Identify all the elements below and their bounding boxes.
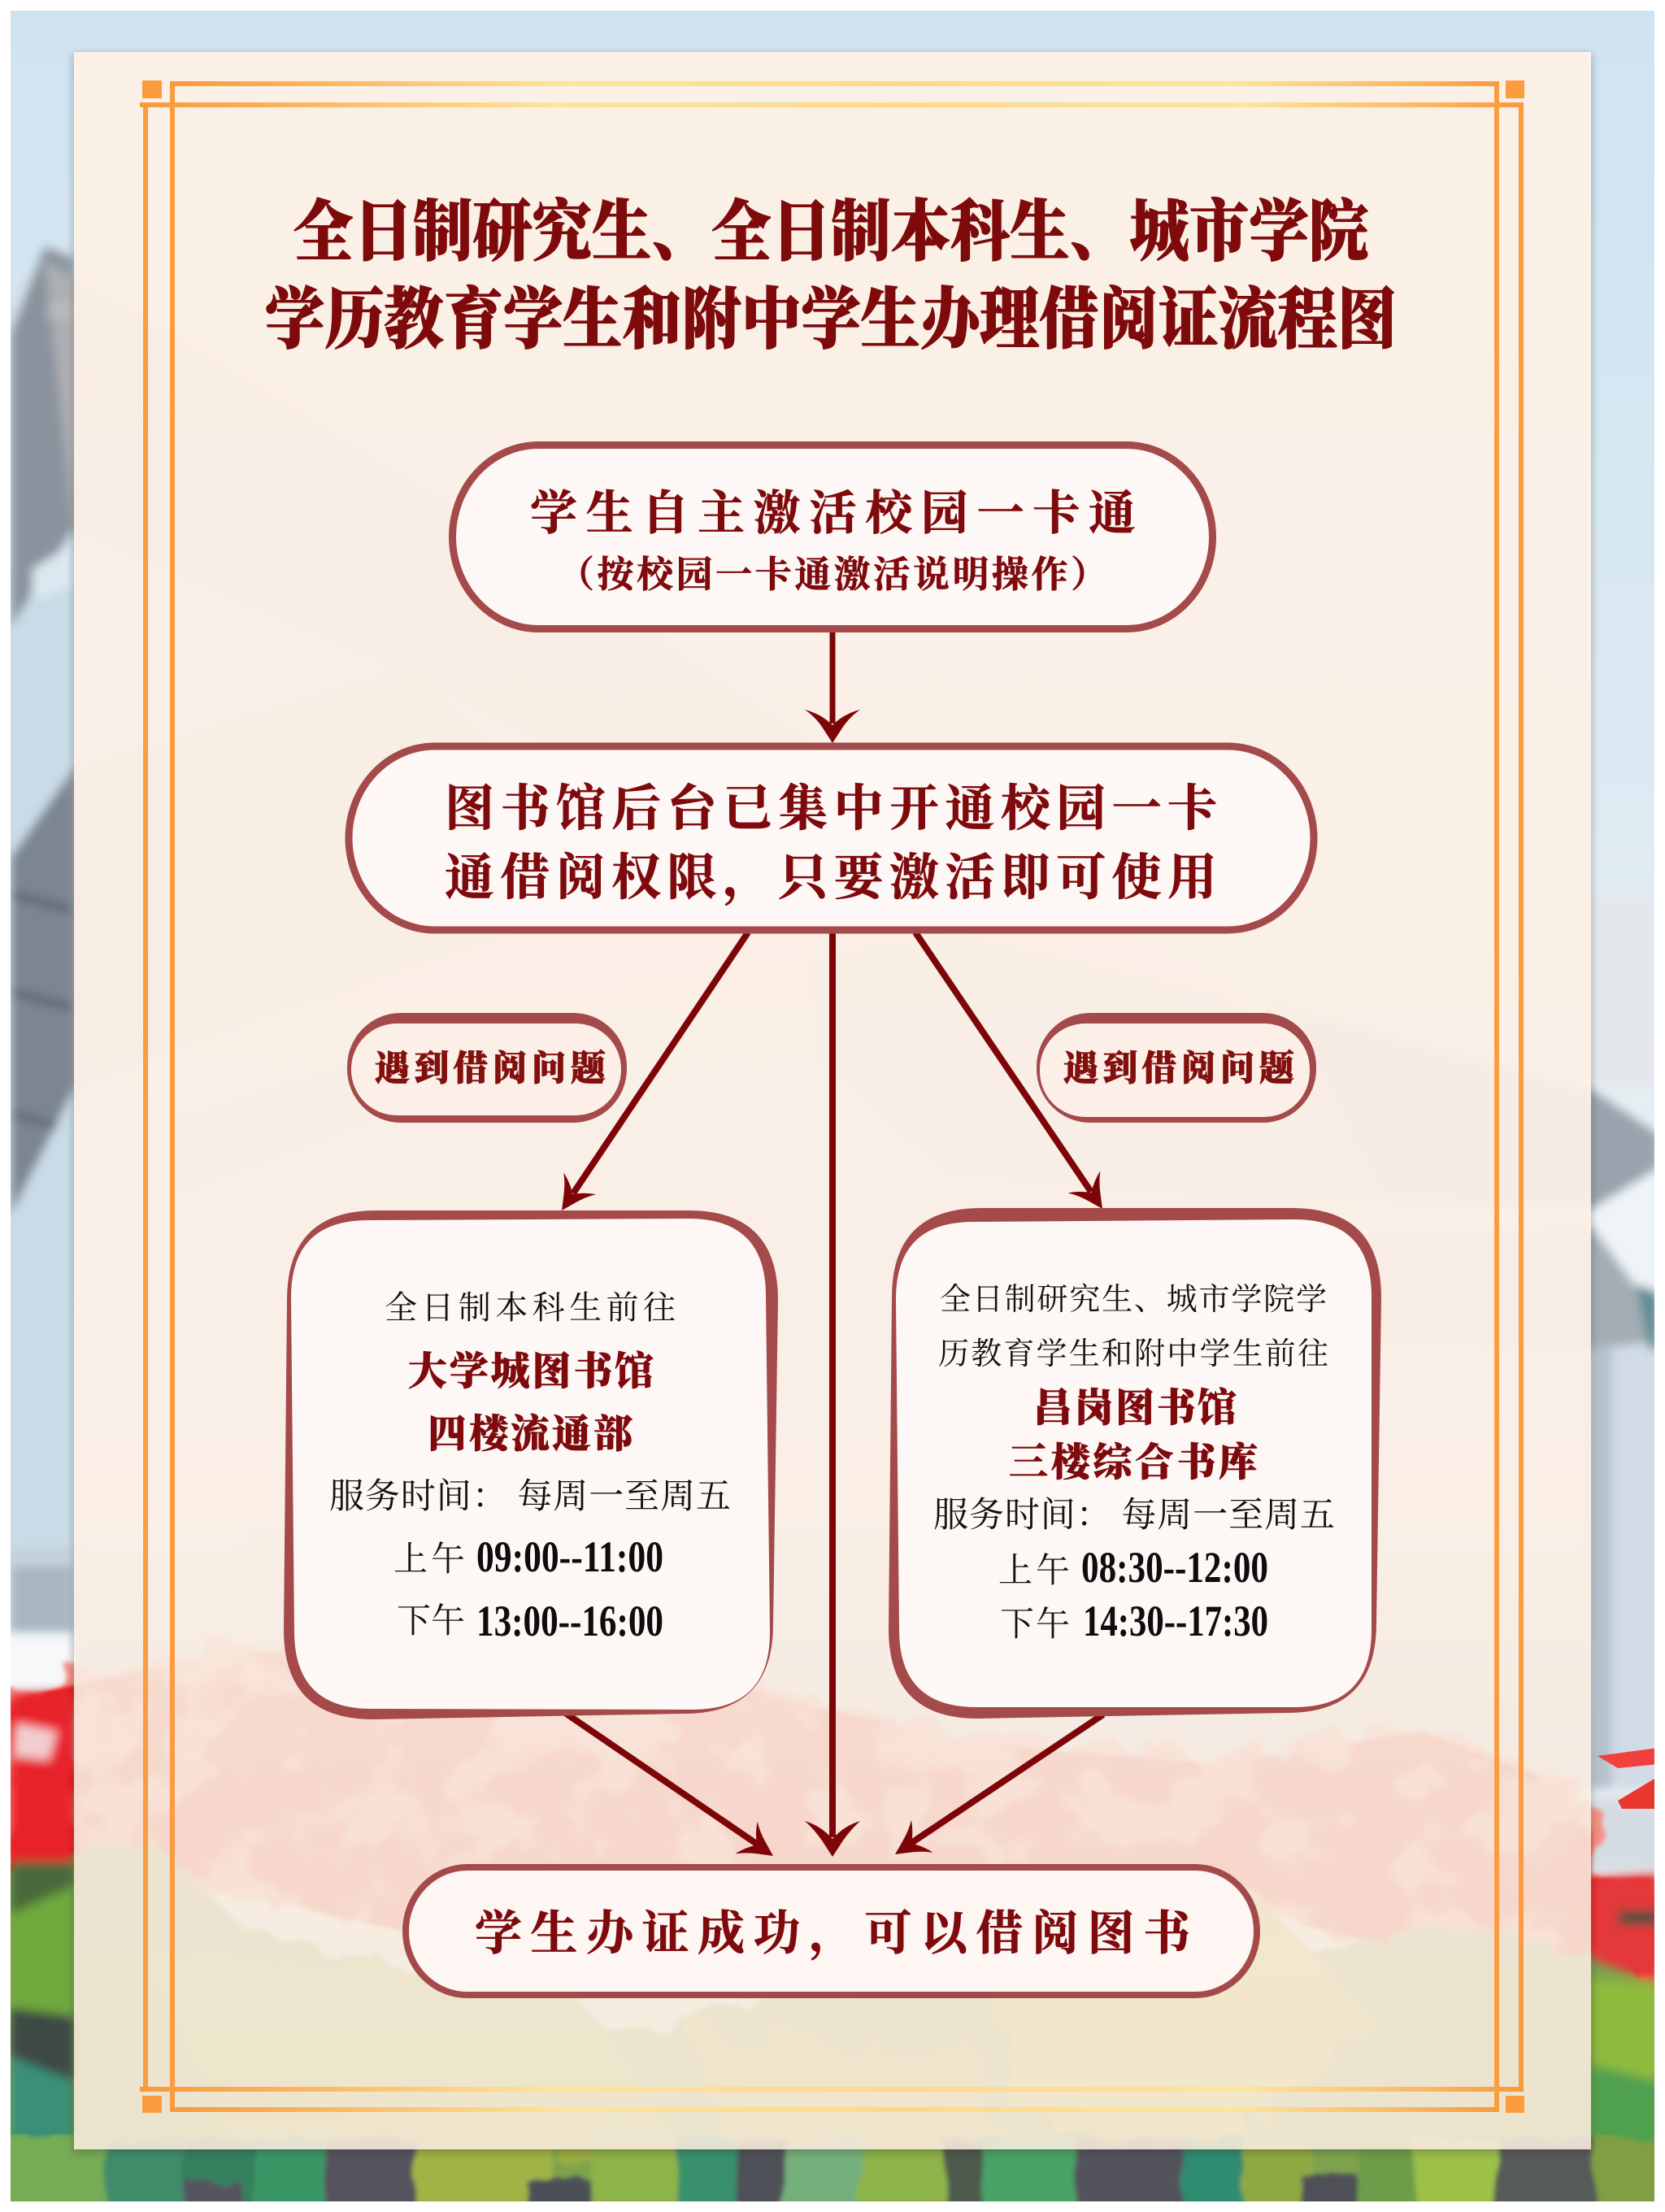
- right pill text: 遇到借阅问题: [1063, 1049, 1294, 1089]
- left service box: University Town Library: [284, 1210, 778, 1719]
- right red streaks: [1598, 1748, 1658, 1768]
- arrow: box 1 to box 2: [805, 632, 860, 743]
- left box text: library name: 大学城图书馆: [408, 1350, 654, 1393]
- darker red flower mottling: [11, 1634, 1654, 1992]
- right box afternoon hours: 14:30--17:30: [1083, 1597, 1268, 1645]
- right box text: who line 1: 全日制研究生、城市学院学: [940, 1283, 1327, 1317]
- right box afternoon hours: [1000, 1597, 1268, 1645]
- left box morning hours: 09:00--11:00: [476, 1533, 663, 1581]
- arrow: right service box to final box: [885, 1714, 1103, 1871]
- bottom strip of leaves: [0, 2138, 1665, 2212]
- right box afternoon hours: 下午: [1000, 1606, 1070, 1644]
- left box morning hours: 上午: [393, 1541, 465, 1579]
- snow: [0, 1634, 1664, 1870]
- left strip flowers and leaves: [11, 1691, 74, 2154]
- green foliage: [0, 1837, 1665, 2212]
- red flowers: [11, 1650, 1654, 1982]
- right service box: Changgang Library: [889, 1208, 1381, 1719]
- right box morning hours: 上午: [998, 1552, 1070, 1590]
- left box morning hours: [393, 1533, 663, 1581]
- right box text: department: 三楼综合书库: [1009, 1441, 1258, 1484]
- arrow: box 2 straight to final box: [805, 932, 860, 1857]
- left box text: who: 全日制本科生前往: [385, 1289, 676, 1326]
- left box afternoon hours: 下午: [397, 1602, 465, 1641]
- box 1: activate campus card: [452, 445, 1213, 629]
- right pill: borrowing problem: [1037, 1013, 1316, 1123]
- left box text: department: 四楼流通部: [428, 1413, 633, 1456]
- right strip flowers and leaves: [1591, 1874, 1658, 2154]
- title: 全日制研究生、全日制本科生、城市学院: [293, 195, 1368, 269]
- arrow: box 2 to left service box: [546, 932, 748, 1221]
- right box text: who line 2: 历教育学生和附中学生前往: [938, 1337, 1328, 1371]
- right box text: service days: 服务时间： 每周一至周五: [933, 1497, 1335, 1535]
- right box morning hours: [998, 1544, 1268, 1592]
- left box afternoon hours: 13:00--16:00: [476, 1597, 663, 1645]
- title: 学历教育学生和附中学生办理借阅证流程图: [265, 283, 1397, 357]
- title: [265, 195, 1397, 357]
- arrow: box 2 to right service box: [915, 932, 1119, 1219]
- building body: [0, 246, 1660, 1788]
- final box: success: [406, 1867, 1257, 1995]
- arrow: left service box to final box: [565, 1713, 785, 1872]
- final box text: 学生办证成功，可以借阅图书: [475, 1907, 1192, 1961]
- left box afternoon hours: [397, 1597, 663, 1645]
- left pill: borrowing problem: [347, 1013, 627, 1123]
- right box text: library name: 昌岗图书馆: [1033, 1387, 1237, 1430]
- box 2 text line 1: 图书馆后台已集中开通校园一卡: [445, 781, 1217, 837]
- box 2: library permission note: [349, 746, 1314, 930]
- decorative double frame: [140, 80, 1524, 2113]
- box 1 main text: 学生自主激活校园一卡通: [530, 487, 1136, 540]
- box 2 text line 2: 通借阅权限，只要激活即可使用: [445, 851, 1217, 906]
- left box text: service days: 服务时间： 每周一至周五: [329, 1478, 731, 1516]
- right box morning hours: 08:30--12:00: [1081, 1544, 1268, 1592]
- left pill text: 遇到借阅问题: [375, 1049, 606, 1089]
- box 1 sub text: （按校园一卡通激活说明操作）: [558, 554, 1107, 595]
